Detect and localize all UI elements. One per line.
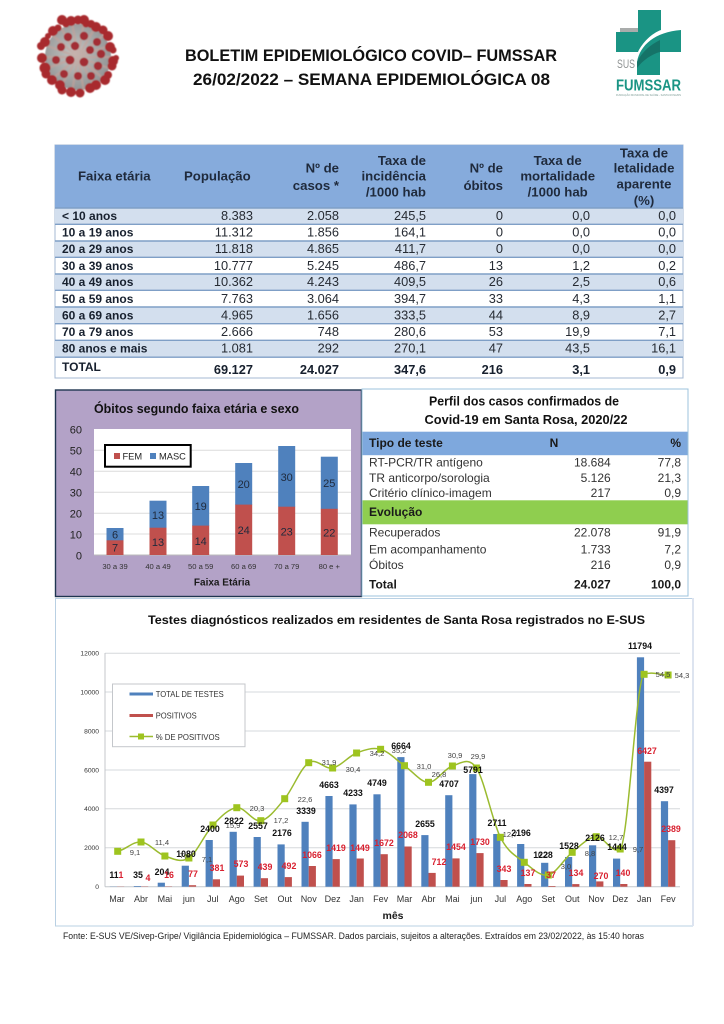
month axis labels: Fev <box>661 894 676 904</box>
row: 40 to 49: 4.243 <box>307 274 339 289</box>
row: 20 to 29: 0,0 <box>572 241 590 256</box>
row: 10 to 19: 10 a 19 anos <box>62 226 134 240</box>
total labels: 2400 <box>200 824 220 834</box>
positive labels: 6427 <box>637 746 657 756</box>
positive labels: 439 <box>258 862 272 872</box>
stacked bar chart: 14 <box>195 536 207 548</box>
stacked bar chart: 50 a 59 <box>188 562 213 571</box>
positive labels: 1419 <box>326 843 346 853</box>
row: 80 and over: 43,5 <box>565 340 590 356</box>
row: 50 to 59: 50 a 59 anos <box>62 292 134 306</box>
percent labels: 30,9 <box>448 751 462 760</box>
row: under 10: 0,0 <box>572 208 590 223</box>
row: 70 to 79: 70 a 79 anos <box>62 325 134 339</box>
row: 10 to 19: 0,0 <box>572 224 590 240</box>
stacked bar chart: 40 <box>70 466 82 478</box>
table header: mortalidade <box>520 169 595 184</box>
percent labels: 54,3 <box>675 671 689 680</box>
total labels: 2822 <box>224 816 244 826</box>
positive labels: 1730 <box>470 837 490 847</box>
row: 10 to 19: 0,0 <box>658 224 676 240</box>
stacked bar chart: 30 a 39 <box>102 562 128 571</box>
percent labels: 26,8 <box>432 770 446 779</box>
row: total: 24.027 <box>300 362 339 377</box>
month axis labels: Jul <box>495 894 506 904</box>
row: 50 to 59 <box>62 291 676 306</box>
row: 70 to 79: 19,9 <box>565 324 590 339</box>
icon: FUMSSAR logo: SUS <box>617 57 635 71</box>
stacked bar chart: 6 <box>112 530 118 542</box>
row: 60 to 69: 2,7 <box>658 307 676 322</box>
total labels: 204 <box>155 867 169 877</box>
month axis labels: Set <box>542 894 556 904</box>
table header: /1000 hab <box>528 185 588 200</box>
table header: Taxa de <box>534 153 582 168</box>
percent labels: 12,7 <box>609 833 623 842</box>
month axis labels: Mar <box>109 894 125 904</box>
table header: População <box>184 169 251 184</box>
panel: deaths by age and sex <box>56 390 362 596</box>
row: total <box>62 360 676 377</box>
legend: MASC <box>159 452 186 462</box>
stacked bar chart: 13 <box>152 510 164 522</box>
total labels: 2126 <box>585 833 605 843</box>
total labels <box>109 641 674 880</box>
row: 20 to 29 <box>62 241 676 256</box>
test type rows: 18.684 <box>574 456 611 470</box>
month axis labels: jun <box>182 894 195 904</box>
row: 80 and over: 292 <box>318 340 339 356</box>
total row: Total <box>369 577 397 591</box>
panel: age table <box>55 145 683 378</box>
panel: case profile <box>362 389 688 596</box>
row: 40 to 49: 40 a 49 anos <box>62 275 134 289</box>
percent labels: 11,4 <box>155 838 169 847</box>
stacked bar chart: 80 e + <box>319 562 341 571</box>
table header: Faixa etária <box>78 169 151 184</box>
row: 70 to 79: 7,1 <box>658 324 676 339</box>
legend: FEM <box>122 452 142 462</box>
row: 60 to 69: 333,5 <box>394 307 426 322</box>
icon: FUMSSAR logo: FUMSSAR <box>616 78 681 94</box>
legend <box>112 684 245 747</box>
stacked bar chart: 30 <box>70 488 82 500</box>
source note: Fonte: E-SUS VE/Sivep-Gripe/ Vigilância Epidemiológica – FUMSSAR. Dados parciais, sujeitos a alterações. Extraídos em 23/02/2022, às 15:40 horas <box>63 931 644 941</box>
y axis and grid <box>80 650 680 891</box>
row: 40 to 49: 409,5 <box>394 274 426 289</box>
legend <box>105 445 191 467</box>
month axis labels: Set <box>254 894 268 904</box>
row: 30 to 39: 0,2 <box>658 258 676 273</box>
row: 50 to 59: 4,3 <box>572 291 590 306</box>
table header: (%) <box>634 193 654 208</box>
test type rows: TR anticorpo/sorologia <box>369 471 490 485</box>
row: under 10: < 10 anos <box>62 209 117 223</box>
row: 70 to 79: 280,6 <box>394 324 426 339</box>
axis title: month: mês <box>382 910 404 922</box>
test type rows: 21,3 <box>658 471 681 485</box>
row: 10 to 19 <box>62 224 676 240</box>
row: 20 to 29: 0 <box>496 241 503 256</box>
outcome rows: 91,9 <box>658 526 681 540</box>
test type rows: Critério clínico-imagem <box>369 486 492 500</box>
row: 40 to 49: 26 <box>489 274 503 289</box>
y axis and grid: 6000 <box>84 768 99 774</box>
row: 40 to 49 <box>62 274 676 289</box>
test type header <box>362 432 688 455</box>
row: total: 3,1 <box>572 362 590 377</box>
total row: 100,0 <box>651 577 681 591</box>
month axis labels: Dez <box>612 894 629 904</box>
stacked bar chart: 10 <box>70 530 82 542</box>
positive labels: 1066 <box>302 850 322 860</box>
positive labels: 37 <box>546 870 556 880</box>
total row <box>369 577 681 591</box>
stacked bar chart: 22 <box>323 528 335 540</box>
y axis and grid: 8000 <box>84 728 99 736</box>
row: 80 and over <box>62 340 676 356</box>
row: under 10: 245,5 <box>394 208 426 223</box>
row: 30 to 39: 486,7 <box>394 258 426 273</box>
positive labels: 137 <box>521 868 535 878</box>
total labels: 11 <box>109 870 119 880</box>
row: 70 to 79: 53 <box>489 324 503 339</box>
percent labels: 9,7 <box>633 845 643 854</box>
total labels: 3339 <box>296 806 316 816</box>
month axis labels: Fev <box>373 894 389 904</box>
panel: diagnostic tests chart <box>56 598 694 926</box>
row: total: 216 <box>482 362 503 377</box>
row: under 10: 2.058 <box>307 208 339 223</box>
icon: FUMSSAR logo: FUNDAÇÃO MUNICIPAL DE SAÚDE - SANTA ROSA/RS <box>616 92 681 97</box>
row: 30 to 39: 30 a 39 anos <box>62 259 134 273</box>
title: 26/02/2022 – SEMANA EPIDEMIOLÓGICA 08 <box>193 70 550 89</box>
month axis labels: Dez <box>325 894 341 904</box>
positive labels: 77 <box>188 869 198 879</box>
total labels: 4663 <box>319 780 339 790</box>
percent labels: 7,8 <box>180 851 190 860</box>
positive labels: 573 <box>234 859 248 869</box>
table header: aparente <box>617 176 671 191</box>
row: 80 and over: 16,1 <box>651 340 676 356</box>
test type rows: 217 <box>591 486 611 500</box>
profile heading: Covid-19 em Santa Rosa, 2020/22 <box>424 413 628 427</box>
table header: Taxa de <box>620 146 668 161</box>
test type rows <box>369 456 681 500</box>
row: 20 to 29: 411,7 <box>395 241 426 256</box>
positive labels: 712 <box>432 857 446 867</box>
test type rows: 5.126 <box>581 471 611 485</box>
stacked bar chart: 50 <box>70 446 82 458</box>
percent labels: 22,6 <box>298 795 312 804</box>
month axis labels: Mai <box>445 894 460 904</box>
percent labels: 20,3 <box>250 804 264 813</box>
percent labels: 30,4 <box>346 765 360 774</box>
outcome header: Evolução <box>369 505 422 519</box>
y axis and grid: 4000 <box>84 806 99 813</box>
table header: Nº de <box>306 161 339 176</box>
test type header: N <box>550 436 558 450</box>
percent labels: 54,5 <box>656 670 670 679</box>
row: 40 to 49: 0,6 <box>658 274 676 289</box>
month axis labels: jun <box>469 894 482 904</box>
table header: /1000 hab <box>366 185 426 200</box>
y axis and grid: 2000 <box>84 845 99 852</box>
month axis labels: Out <box>565 894 580 904</box>
test type rows: 0,9 <box>664 486 681 500</box>
month axis labels: Out <box>277 894 292 904</box>
stacked bar chart: 25 <box>323 478 335 490</box>
row: 30 to 39: 10.777 <box>214 258 253 273</box>
positive labels: 4 <box>146 873 151 883</box>
row: 60 to 69: 60 a 69 anos <box>62 308 134 322</box>
row: 60 to 69: 4.965 <box>221 307 253 322</box>
row: 10 to 19: 164,1 <box>394 224 426 240</box>
row: 60 to 69: 8,9 <box>572 307 590 322</box>
row: 20 to 29: 11.818 <box>215 241 253 256</box>
row: total: TOTAL <box>62 360 101 374</box>
row: 80 and over: 1.081 <box>221 340 253 356</box>
percent labels: 12,7 <box>503 830 517 839</box>
positive labels: 140 <box>616 868 630 878</box>
total labels: 2655 <box>415 819 435 829</box>
outcome rows: 22.078 <box>574 526 611 540</box>
positive labels: 16 <box>164 870 174 880</box>
positive labels: 381 <box>210 863 224 873</box>
y axis and grid: 12000 <box>80 650 99 658</box>
legend: TOTAL DE TESTES <box>156 689 224 699</box>
month axis labels: Ago <box>229 894 245 904</box>
percent labels: 3,0 <box>561 862 571 871</box>
month axis labels <box>109 894 676 904</box>
outcome rows: 7,2 <box>664 542 681 556</box>
total labels: 2176 <box>272 828 292 838</box>
outcome rows: Recuperados <box>369 526 440 540</box>
total row: 24.027 <box>574 577 611 591</box>
test type header: % <box>670 436 681 450</box>
percent labels: 15,9 <box>226 821 240 830</box>
positive labels: 1454 <box>446 842 466 852</box>
table header: Nº de <box>470 161 503 176</box>
month axis labels: Jul <box>207 894 219 904</box>
percent labels: 7,1 <box>202 855 212 864</box>
chart heading: Testes diagnósticos realizados em residentes de Santa Rosa registrados no E-SUS <box>148 613 645 627</box>
positive labels: 1672 <box>374 838 394 848</box>
row: 10 to 19: 1.856 <box>307 224 339 240</box>
legend: % DE POSITIVOS <box>156 732 220 742</box>
outcome rows: Óbitos <box>369 557 404 572</box>
percent labels: 35,2 <box>392 746 406 755</box>
outcome header <box>362 500 688 524</box>
row: 50 to 59: 3.064 <box>307 291 339 306</box>
stacked bar chart: 60 <box>70 424 82 436</box>
row: 10 to 19: 11.312 <box>215 224 253 240</box>
positive labels: 2389 <box>661 824 681 834</box>
outcome rows <box>369 526 681 572</box>
row: 50 to 59: 33 <box>489 291 503 306</box>
total labels: 2711 <box>487 818 507 828</box>
table header: casos * <box>293 178 340 193</box>
profile heading <box>424 395 628 427</box>
title <box>185 46 557 89</box>
month axis labels: Jan <box>637 894 651 904</box>
outcome rows: 216 <box>591 558 611 572</box>
total labels: 35 <box>133 870 143 880</box>
row: under 10: 0 <box>496 208 503 223</box>
table header: incidência <box>362 169 427 184</box>
outcome rows: 1.733 <box>581 542 611 556</box>
total labels: 1080 <box>176 849 196 859</box>
total labels: 1444 <box>607 842 627 852</box>
row: under 10 <box>62 208 676 223</box>
percent labels: 9,1 <box>130 848 140 857</box>
legend: POSITIVOS <box>156 710 197 720</box>
chart title: Óbitos segundo faixa etária e sexo <box>94 401 299 416</box>
total labels: 1228 <box>533 850 553 860</box>
axis title: Faixa Etária <box>194 578 251 589</box>
row: under 10: 0,0 <box>658 208 676 223</box>
row: 60 to 69 <box>62 307 676 322</box>
stacked bar chart <box>70 424 351 571</box>
month axis labels: Abr <box>421 894 436 904</box>
y axis and grid: 0 <box>95 884 99 891</box>
percent labels: 31,0 <box>417 762 431 771</box>
total labels: 4749 <box>367 778 387 788</box>
row: 60 to 69: 1.656 <box>307 307 339 322</box>
positive labels: 270 <box>594 871 608 881</box>
row: 20 to 29: 4.865 <box>307 241 339 256</box>
positive labels <box>119 746 681 883</box>
stacked bar chart: 23 <box>281 527 293 539</box>
positive labels: 1 <box>119 870 124 880</box>
row: 80 and over: 47 <box>489 340 503 356</box>
percent labels: 29,9 <box>471 752 485 761</box>
row: 80 and over: 80 anos e mais <box>62 342 148 356</box>
line: percent positive <box>114 671 672 878</box>
y axis and grid: 10000 <box>80 690 99 696</box>
total labels: 11794 <box>628 641 652 651</box>
month axis labels: Mai <box>158 894 172 904</box>
test type rows: 77,8 <box>658 456 681 470</box>
stacked bar chart: 0 <box>76 550 82 562</box>
icon: coronavirus <box>37 15 119 98</box>
row: 50 to 59: 1,1 <box>658 291 676 306</box>
total labels: 4707 <box>439 779 459 789</box>
month axis labels: Nov <box>301 894 317 904</box>
stacked bar chart: 20 <box>238 479 250 491</box>
total labels: 5791 <box>463 765 483 775</box>
percent labels: 8,8 <box>585 849 595 858</box>
month axis labels: Abr <box>134 894 148 904</box>
positive labels: 492 <box>282 861 296 871</box>
row: 50 to 59: 7.763 <box>221 291 253 306</box>
test type header: Tipo de teste <box>369 436 443 450</box>
month axis labels: Nov <box>588 894 605 904</box>
stacked bar chart: 7 <box>112 543 118 555</box>
month axis labels: Mar <box>397 894 412 904</box>
stacked bar chart: 30 <box>281 472 293 484</box>
row: 10 to 19: 0 <box>496 224 503 240</box>
outcome rows: Em acompanhamento <box>369 542 487 556</box>
row: 80 and over: 270,1 <box>394 340 426 356</box>
row: 30 to 39: 13 <box>489 258 503 273</box>
month axis labels: Jan <box>349 894 364 904</box>
stacked bar chart: 20 <box>70 508 82 520</box>
total labels: 4233 <box>343 788 363 798</box>
row: under 10: 8.383 <box>221 208 253 223</box>
row: 20 to 29: 20 a 29 anos <box>62 242 134 256</box>
total labels: 1528 <box>559 841 579 851</box>
total labels: 4397 <box>654 785 674 795</box>
row: 20 to 29: 0,0 <box>658 241 676 256</box>
title: BOLETIM EPIDEMIOLÓGICO COVID– FUMSSAR <box>185 46 557 65</box>
row: total: 69.127 <box>214 362 253 377</box>
stacked bar chart: 70 a 79 <box>274 562 299 571</box>
percent labels: 6,2 <box>538 850 548 859</box>
month axis labels: Ago <box>516 894 532 904</box>
total labels: 2557 <box>248 821 268 831</box>
row: total: 0,9 <box>658 362 676 377</box>
icon: FUMSSAR logo <box>616 10 681 97</box>
stacked bar chart: 19 <box>195 501 207 513</box>
bars: total tests <box>110 657 668 887</box>
table header: Taxa de <box>378 153 426 168</box>
row: 50 to 59: 394,7 <box>394 291 426 306</box>
percent labels: 34,2 <box>370 749 384 758</box>
total labels: 2196 <box>511 828 531 838</box>
positive labels: 134 <box>569 868 583 878</box>
total labels: 6664 <box>391 741 411 751</box>
row: 70 to 79: 748 <box>318 324 339 339</box>
row: 30 to 39 <box>62 258 676 273</box>
outcome rows: 0,9 <box>664 558 681 572</box>
row: total: 347,6 <box>394 362 426 377</box>
positive labels: 2068 <box>398 830 418 840</box>
stacked bar chart: 40 a 49 <box>145 562 171 571</box>
stacked bar chart: 24 <box>238 525 250 537</box>
table header <box>78 146 674 208</box>
positive labels: 1449 <box>350 843 370 853</box>
table header: letalidade <box>614 161 674 176</box>
row: 70 to 79: 2.666 <box>221 324 253 339</box>
positive labels: 343 <box>497 864 511 874</box>
row: 60 to 69: 44 <box>489 307 503 322</box>
percent labels <box>130 670 689 871</box>
profile heading: Perfil dos casos confirmados de <box>429 395 619 409</box>
row: 30 to 39: 1,2 <box>572 258 590 273</box>
percent labels: 31,9 <box>322 758 336 767</box>
percent labels: 17,2 <box>274 816 288 825</box>
row: 70 to 79 <box>62 324 676 339</box>
row: 30 to 39: 5.245 <box>307 258 339 273</box>
row: 40 to 49: 2,5 <box>572 274 590 289</box>
table header: óbitos <box>463 178 503 193</box>
stacked bar chart: 13 <box>152 537 164 549</box>
row: 40 to 49: 10.362 <box>214 274 253 289</box>
bars: positives <box>117 762 675 887</box>
test type rows: RT-PCR/TR antígeno <box>369 456 483 470</box>
stacked bar chart: 60 a 69 <box>231 562 256 571</box>
